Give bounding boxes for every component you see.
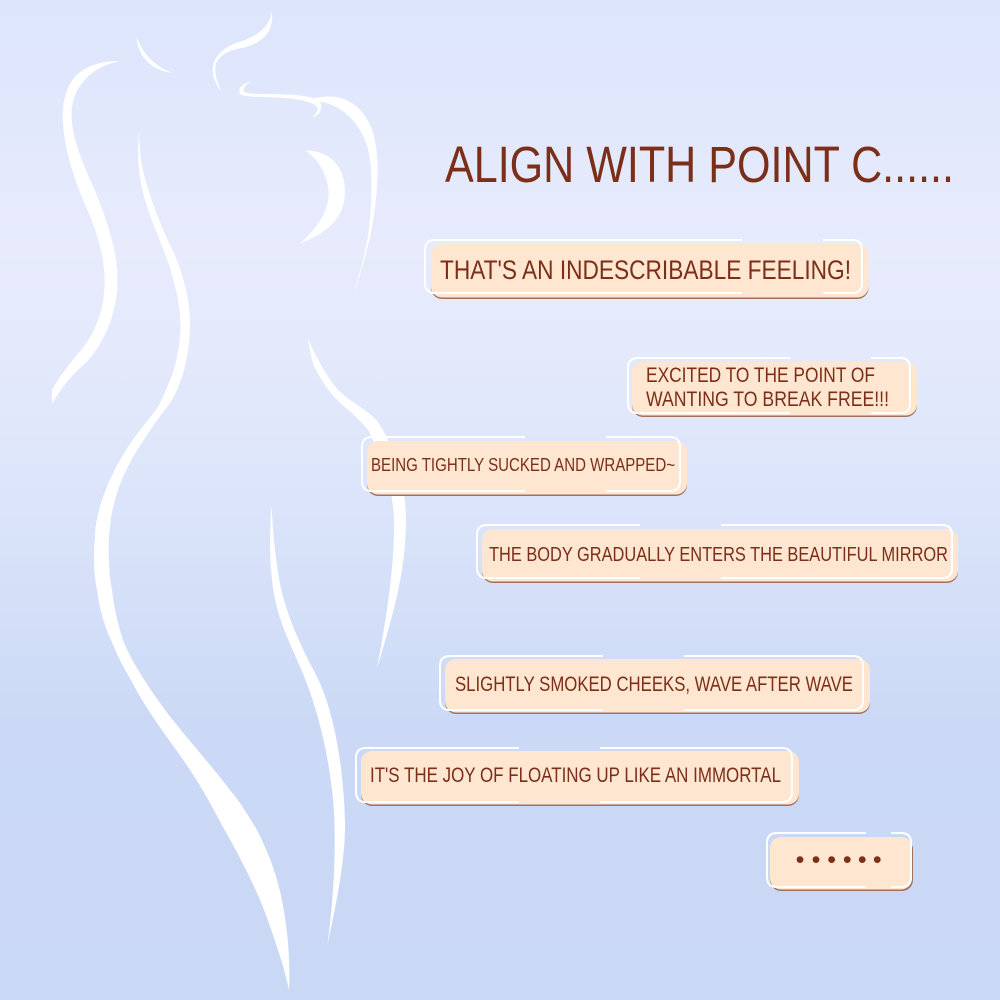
breast crescent xyxy=(300,151,345,243)
neck crescent xyxy=(137,36,172,73)
bubble: ellipsis xyxy=(767,833,913,891)
right hip stroke xyxy=(308,338,406,668)
bubble: indescribable feeling xyxy=(425,240,868,299)
upper torso line xyxy=(138,132,190,380)
left arm and shoulder stroke xyxy=(52,61,120,404)
hip and outer leg stroke xyxy=(94,380,289,990)
bubble: excited to break free: WANTING TO BREAK FREE!!! xyxy=(646,388,889,411)
bubble: excited to break free xyxy=(628,358,917,417)
bubble: excited to break free: EXCITED TO THE POINT OF xyxy=(646,364,875,387)
body silhouette xyxy=(52,12,406,990)
inner thigh line xyxy=(270,505,345,945)
bubble: beautiful mirror xyxy=(477,525,958,583)
bubble: indescribable feeling: THAT'S AN INDESCRIBABLE FEELING! xyxy=(440,255,851,285)
bubble: tightly sucked and wrapped xyxy=(362,437,687,496)
hair curl xyxy=(213,12,272,92)
bubble: tightly sucked and wrapped: BEING TIGHTLY SUCKED AND WRAPPED~ xyxy=(371,454,675,475)
bubble: smoked cheeks: SLIGHTLY SMOKED CHEEKS, WAVE AFTER WAVE xyxy=(455,673,853,696)
bubble: ellipsis: •••••• xyxy=(796,846,882,874)
right shoulder and arm stroke xyxy=(239,82,378,298)
bubble: floating immortal: IT'S THE JOY OF FLOATING UP LIKE AN IMMORTAL xyxy=(370,764,781,787)
bubble: smoked cheeks xyxy=(440,656,870,714)
bubble: floating immortal xyxy=(356,748,799,806)
